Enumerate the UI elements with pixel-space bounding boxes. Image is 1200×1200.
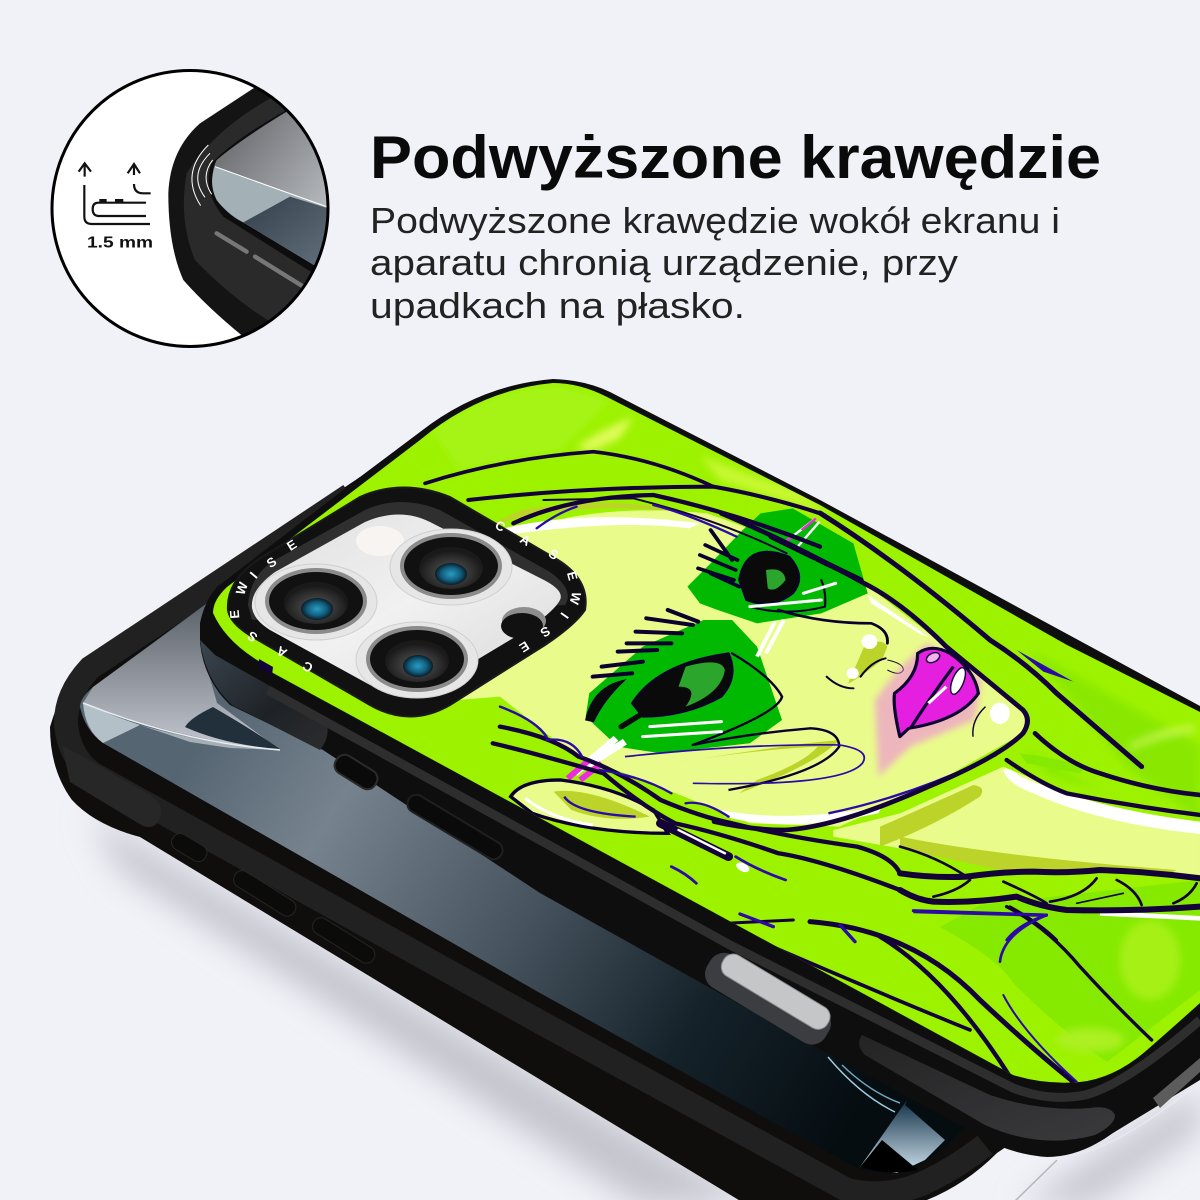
transparent case edge <box>1013 1160 1057 1200</box>
camera ring inner bevel <box>248 502 568 620</box>
neck and hair right of face <box>833 650 1200 918</box>
lidar sensor <box>501 607 546 639</box>
face skin <box>457 510 1027 827</box>
CASEWISE lettering on ring: S <box>244 628 260 645</box>
CASEWISE lettering on ring: C <box>299 658 316 676</box>
navy art fragment at ring edge <box>258 659 273 675</box>
white hair highlight <box>505 517 700 534</box>
side button: volume up <box>231 868 299 919</box>
cheek strands <box>661 740 839 793</box>
side frame highlight <box>268 690 1200 1097</box>
inset circle: raised edge close-up <box>52 60 340 360</box>
CASEWISE lettering on ring: E <box>564 570 581 582</box>
CASEWISE lettering on ring: I <box>247 569 260 581</box>
case frame inner band <box>66 495 985 1193</box>
nose <box>848 642 887 683</box>
flash <box>356 526 404 556</box>
CASEWISE lettering on ring: A <box>517 531 534 549</box>
screen upper glass reflection <box>83 607 280 750</box>
title: Podwyższone krawędzie <box>370 124 1101 191</box>
shadow under phones <box>90 815 1200 1200</box>
green eyeshadow: upper eye <box>687 508 868 623</box>
lighter and darker green patches <box>940 880 1200 1062</box>
description text: aparatu chronią urządzenie, przy <box>370 242 958 283</box>
side button <box>404 791 506 863</box>
CASEWISE lettering on ring: C <box>492 517 509 535</box>
icon: 1.5 mm edge diagram <box>79 163 151 224</box>
circle outline <box>52 70 328 346</box>
close-up of case corner <box>168 88 326 335</box>
lens: top right <box>390 529 512 605</box>
case body <box>200 379 1200 1157</box>
CASEWISE lettering on ring: W <box>233 579 251 597</box>
face outline and braid <box>493 513 1027 890</box>
screen <box>80 520 1010 1173</box>
white and pink lash marks <box>786 518 820 548</box>
jaw highlight <box>721 807 882 824</box>
lower hair strands <box>723 907 1152 1082</box>
CASEWISE lettering on ring: S <box>264 553 280 571</box>
power slot <box>331 751 381 793</box>
CASEWISE lettering on ring: I <box>558 610 572 621</box>
CASEWISE lettering on ring: S <box>537 623 553 641</box>
metal button <box>699 944 838 1051</box>
CASEWISE lettering on ring: E <box>284 536 300 554</box>
CASEWISE lettering on ring: A <box>273 643 290 661</box>
lips <box>894 648 978 737</box>
bumper left corner <box>62 745 161 827</box>
screen bottom light rays <box>860 1100 945 1173</box>
upper phone with black case <box>200 370 1200 1157</box>
camera plateau <box>252 514 561 692</box>
case artwork: green back panel <box>200 370 1200 1100</box>
ear <box>511 780 668 833</box>
face artwork <box>479 503 1027 890</box>
case frame <box>50 477 1060 1200</box>
lower eye <box>586 610 782 745</box>
description text: Podwyższone krawędzie wokół ekranu i <box>370 200 1060 241</box>
upper eye <box>698 530 888 643</box>
hair strands and braid right of face <box>820 513 1200 940</box>
CASEWISE lettering on ring <box>227 517 584 676</box>
side button: volume down <box>310 915 378 966</box>
description text: upadkach na płasko. <box>370 285 745 326</box>
label: 1.5 mm: 1.5 mm <box>87 234 153 252</box>
white arcs <box>192 145 213 206</box>
CASEWISE lettering on ring: W <box>566 590 584 607</box>
CASEWISE lettering on ring: E <box>516 638 532 656</box>
lens: bottom <box>356 622 478 698</box>
camera ring <box>227 488 586 716</box>
lens: left <box>255 564 377 640</box>
top hair strands <box>425 452 820 553</box>
CASEWISE lettering on ring: E <box>227 609 242 619</box>
description text <box>370 200 1060 326</box>
left bumper <box>200 640 328 750</box>
corner bumper <box>859 1035 1115 1141</box>
side button: action <box>169 830 210 865</box>
green eyeshadow: lower eye <box>586 620 782 753</box>
bottom-right charging slot <box>1153 1058 1200 1108</box>
blush <box>875 643 982 777</box>
lower phone with black case <box>50 477 1060 1200</box>
CASEWISE lettering on ring: S <box>546 546 562 563</box>
